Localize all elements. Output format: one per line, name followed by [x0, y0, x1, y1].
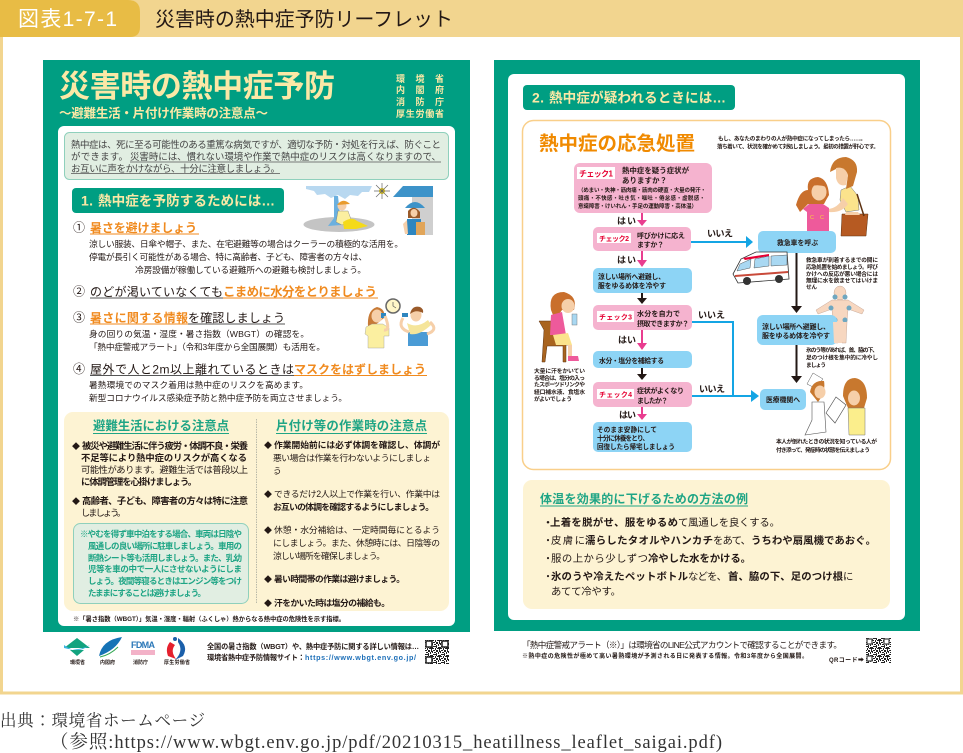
QR code left: [425, 640, 449, 664]
section heading 1: 熱中症を予防するためには…: [98, 192, 275, 208]
note: sweating: がよいでしょう: [534, 395, 572, 403]
advice 1: ①: [73, 220, 85, 234]
note: sweating: 大量に汗をかいてい: [534, 367, 585, 375]
site information: 全国の暑さ指数（WBGT）や、熱中症予防に関する詳しい情報は…: [207, 642, 419, 651]
no label and arrow to ambulance: いいえ: [707, 228, 733, 238]
advice 4: [73, 362, 427, 403]
right column text: にしましょう。また、休憩時には、日陰等の: [273, 537, 440, 548]
step: move to cool place: 涼しい場所へ避難し、: [598, 272, 665, 281]
no label and line from check 3: [692, 310, 733, 396]
no label and arrow to hospital: [692, 384, 759, 402]
source credit: （参照:https://www.wbgt.env.go.jp/pdf/20210315_heatillness_leaflet_saigai.pdf): [50, 732, 722, 753]
source credit: 出典：環境省ホームページ: [0, 711, 205, 730]
check 2: ますか？: [637, 241, 664, 249]
cooling method list: ・: [543, 536, 553, 547]
note: sweating: たスポーツドリンクや: [534, 380, 585, 388]
illustration: mother and girl: [796, 157, 868, 236]
white content area: [58, 126, 455, 626]
intro box: ができます。: [71, 151, 128, 163]
left column text: ◆: [72, 442, 80, 451]
cooling method list: [543, 516, 876, 598]
header band: [0, 0, 963, 37]
site information: 環境省熱中症予防情報サイト：: [207, 653, 305, 662]
car sleeping note: 断熱シート等も活用しましょう。また、乳幼: [88, 553, 242, 563]
step: medical institution: 医療機関へ: [766, 395, 800, 404]
advice 1: [73, 220, 403, 275]
step: call ambulance: [758, 231, 836, 253]
advice 2: のどが渇いていなくても: [90, 284, 223, 299]
QR code right: [866, 638, 891, 663]
figure title: 災害時の熱中症予防リーフレット: [155, 8, 453, 31]
check 1: （めまい・失神・筋肉痛・筋肉の硬直・大量の発汗・: [578, 186, 706, 194]
advice 3: ③: [73, 310, 85, 324]
advice 2: ②: [73, 284, 85, 298]
logo: fire agency: FDMA: [131, 640, 156, 650]
cooling method list: 冷やした水をかける。: [648, 552, 751, 565]
panel: first aid flowchart: [522, 120, 890, 470]
leaflet title: 災害時の熱中症予防: [59, 69, 335, 104]
cooling method list: て風通しを良くする。: [678, 516, 780, 529]
right column text: [264, 439, 440, 608]
advice 4: 新型コロナウイルス感染症予防と熱中症予防を両立させましょう。: [89, 392, 347, 403]
right column text: ◆: [264, 599, 272, 608]
logo: fire agency: 消防庁: [133, 659, 148, 666]
source credit: [0, 711, 722, 753]
advice 3: を確認しましょう: [188, 310, 285, 325]
left column heading: 避難生活における注意点: [93, 418, 229, 433]
cooling method list: ・: [543, 518, 553, 529]
step: rest and go home: 回復したら帰宅しましょう: [597, 442, 675, 451]
right column text: ◆: [264, 526, 272, 535]
check 3: チェック3: [599, 312, 632, 322]
check 2: [593, 227, 691, 251]
site information: [207, 642, 419, 662]
right column text: う。: [273, 466, 283, 476]
left column text: しましょう。: [81, 508, 126, 518]
check 1: 頭痛・不快感・吐き気・嘔吐・倦怠感・虚脱感・: [578, 194, 705, 202]
figure number tab: [0, 0, 140, 37]
cooling method list: などを、: [688, 571, 727, 583]
LINE alert note: [522, 639, 864, 664]
note: ice pack: ましょう: [806, 362, 826, 369]
left column text: 不足等により熱中症のリスクが高くなる: [81, 452, 247, 463]
left column text: 高齢者、子ども、障害者の方々は特に注意: [82, 495, 249, 506]
car sleeping note: たままにすることは避けましょう。: [88, 588, 206, 598]
right column text: お互いの体調を確認するようにしましょう。: [273, 501, 434, 512]
car sleeping note: しょう。夜間等寝るときはエンジン等をつけ: [88, 576, 242, 586]
first aid intro: [717, 134, 879, 150]
check 4: 症状がよくなり: [637, 386, 684, 395]
step: move to cool place: 服をゆるめ体を冷やす: [598, 281, 666, 290]
cooling method list: をあて、: [713, 535, 751, 547]
cooling method list: うちわや扇風機であおぐ。: [751, 534, 876, 547]
logo: environment: 環境省: [70, 659, 85, 666]
no label and arrow to hospital: いいえ: [699, 384, 725, 394]
advice 2: [73, 284, 378, 299]
check 1: ありますか？: [622, 176, 667, 185]
yes label and arrow 2: [617, 251, 647, 267]
check 2: 呼びかけに応え: [637, 231, 685, 240]
arrow to check 4: [637, 368, 647, 380]
advice 1: 涼しい服装、日傘や帽子、また、在宅避難等の場合はクーラーの積極的な活用を。: [89, 238, 403, 249]
car sleeping note: 風通しの良い場所に駐車しましょう。車用の: [88, 541, 242, 551]
check 2: チェック2: [599, 234, 629, 243]
ministries list: 消 防 庁: [396, 96, 444, 107]
note: first aid until arrival: 救急車が到着するまでの間に: [806, 256, 878, 264]
step: cool place right: 服をゆるめ体を冷やす: [762, 331, 830, 340]
note: witness accompanies: 本人が倒れたときの状況を知っている人が: [776, 438, 877, 446]
ministries list: 厚生労働省: [396, 108, 444, 119]
advice 4: ④: [73, 362, 85, 376]
check 1: チェック1: [579, 168, 614, 178]
car sleeping note: [74, 524, 248, 604]
right column text: ◆: [264, 441, 272, 450]
note: sweating: る場合は、塩分の入っ: [534, 374, 585, 382]
right column text: 暑い時間帯の作業は避けましょう。: [274, 573, 405, 584]
section heading 1: 1.: [81, 192, 93, 208]
right column text: ◆: [264, 490, 272, 499]
right column text: 汗をかいた時は塩分の補給も。: [274, 597, 390, 608]
check 4: [593, 382, 692, 407]
step: rehydrate: [593, 351, 692, 368]
check 1: 熱中症を疑う症状が: [622, 166, 690, 175]
intro box: [64, 132, 448, 180]
step: medical institution: [760, 389, 806, 410]
cooling method list: 服の上から少しずつ: [551, 552, 648, 565]
panel: right leaflet page: [494, 60, 920, 631]
cooling method list: 皮膚に: [551, 534, 585, 547]
section heading 2: [523, 85, 735, 110]
illustration: body cooling points: [816, 286, 864, 343]
left column text: 被災や避難生活に伴う疲労・体調不良・栄養: [82, 440, 249, 451]
intro box: お互いに声をかけながら、十分に注意しましょう。: [71, 163, 280, 175]
illustration: people drinking and clock: [365, 299, 434, 348]
left column text: に体調管理を心掛けましょう。: [81, 476, 197, 487]
step: rest and go home: 十分に休養をとり、: [597, 434, 649, 442]
site information: https://www.wbgt.env.go.jp/: [305, 653, 416, 662]
left column text: [72, 440, 249, 518]
right column heading: 片付け等の作業時の注意点: [276, 418, 427, 433]
illustration: mother and girl: CC: [810, 215, 824, 221]
advice 2: こまめに水分をとりましょう: [223, 284, 377, 299]
panel: precautions: [64, 412, 449, 611]
note: first aid until arrival: 応急処置を始めましょう。呼び: [806, 263, 878, 271]
cooling method list: あてて冷やす。: [551, 586, 621, 598]
illustration: girl on chair: [539, 292, 579, 362]
illustration: ambulance: [733, 252, 789, 285]
cooling method list: に: [843, 571, 853, 583]
illustration: nurse and witness: [805, 373, 867, 435]
arrow to check 3: [637, 293, 647, 304]
LINE alert note: ※熱中症の危険性が極めて高い暑熱環境が予測される日に発表する情報。令和3年度から全国展開。: [522, 652, 808, 660]
no label and arrow to ambulance: [691, 228, 753, 248]
yes label and arrow 2: はい: [617, 255, 636, 265]
check 4: ましたか？: [637, 397, 668, 405]
advice 3: 「熱中症警戒アラート」（令和3年度から全国展開）も活用を。: [89, 341, 325, 352]
arrow from ambulance to cool place: [791, 253, 802, 313]
note: first aid until arrival: [806, 256, 878, 291]
advice 3: 身の回りの気温・湿度・暑さ指数（WBGT）の確認を。: [89, 328, 309, 339]
yes label and arrow 4: はい: [619, 410, 636, 420]
note: first aid until arrival: かけへの反応が悪い場合には: [806, 270, 878, 278]
illustration: shade and parasol: [304, 183, 433, 235]
note: witness accompanies: [776, 438, 877, 454]
WBGT footnote: ※「暑さ指数（WBGT）」気温・湿度・輻射（ふくしゃ）熱からなる熱中症の危険性を示す指標。: [73, 614, 345, 623]
section heading 1: [72, 188, 284, 213]
first aid intro: 落ち着いて、状況を確かめて対処しましょう。最初の措置が肝心です。: [717, 142, 879, 150]
check 1: [574, 163, 712, 213]
right column text: 悪い場合は作業を行わないようにしましょ: [273, 452, 431, 463]
cooling method list: ・: [543, 554, 553, 565]
first aid intro: もし、あなたのまわりの人が熱中症になってしまったら……。: [718, 134, 866, 142]
advice 1: 暑さを避けましょう: [90, 220, 197, 235]
step: move to cool place: [593, 268, 692, 293]
panel: ways to lower body temperature: [523, 480, 890, 609]
section heading 2: 2.: [532, 90, 544, 106]
cooling method list: ・: [543, 572, 553, 583]
logo: cabinet office: 内閣府: [100, 659, 115, 666]
check 4: チェック4: [599, 390, 632, 399]
logo: fire agency: [131, 640, 156, 666]
step: cool place right: 涼しい場所へ避難し、: [762, 322, 830, 331]
note: witness accompanies: 付き添って、発症時の状態を伝えましょう: [776, 446, 870, 454]
yes label and arrow 3: はい: [618, 335, 636, 345]
panel: left leaflet page: [43, 60, 470, 632]
note: sweating: [534, 367, 585, 403]
advice 4: 暑熱環境でのマスク着用は熱中症のリスクを高めます。: [89, 379, 308, 390]
note: first aid until arrival: せん: [806, 284, 817, 291]
left column text: 可能性があります。避難生活では普段以上: [81, 464, 248, 475]
cooling heading: 体温を効果的に下げるための方法の例: [540, 491, 748, 506]
yes label and arrow 3: [618, 330, 647, 350]
car sleeping note: ※やむを得ず車中泊をする場合、車両は日陰や: [80, 529, 242, 539]
cooling method list: 氷のうや冷えたペットボトル: [551, 570, 689, 583]
leaflet subtitle: ～避難生活・片付け作業時の注意点～: [59, 106, 268, 120]
check 1: 意識障害・けいれん・手足の運動障害・高体温）: [578, 202, 697, 210]
first aid heading: 熱中症の応急処置: [539, 132, 695, 155]
advice 4: マスクをはずしましょう: [294, 362, 426, 376]
right column text: ◆: [264, 575, 272, 584]
note: ice pack: 氷のう等があれば、首、脇の下、: [806, 346, 878, 354]
yes label and arrow 4: [619, 407, 647, 420]
ministries list: [396, 73, 444, 119]
note: ice pack: 足のつけ根を集中的に冷やし: [806, 354, 878, 362]
step: rehydrate: 水分・塩分を補給する: [599, 356, 664, 365]
white content area: [508, 74, 905, 620]
LINE alert note: QRコード➡: [829, 657, 864, 664]
ministry logos: [64, 637, 190, 666]
cooling method list: 濡らしたタオルやハンカチ: [585, 535, 713, 547]
ministries list: 環 境 省: [396, 73, 444, 84]
step: cool place right: [757, 315, 846, 345]
check 3: 水分を自力で: [637, 309, 680, 318]
advice 1: 冷房設備が稼働している避難所への避難も検討しましょう。: [135, 264, 366, 275]
note: ice pack: [806, 346, 878, 369]
figure number tab: 図表1-7-1: [18, 8, 117, 31]
step: rest and go home: [593, 422, 692, 452]
LINE alert note: 「熱中症警戒アラート（※）」は環境省のLINE公式アカウントで確認することができます。: [522, 639, 842, 650]
yes label and arrow 1: はい: [617, 216, 636, 226]
advice 4: 屋外で人と2m以上離れているときは: [90, 362, 294, 376]
cooling method list: 上着を脱がせ、服をゆるめ: [550, 516, 678, 529]
logo: MHLW: 厚生労働省: [164, 659, 190, 666]
cooling method list: 首、脇の下、足のつけ根: [728, 570, 844, 583]
right column text: 涼しい場所を確保しましょう。: [273, 550, 385, 561]
right column text: 作業開始前には必ず体調を確認し、体調が: [274, 439, 440, 450]
check 3: 摂取できますか？: [637, 319, 689, 328]
intro box: 熱中症は、死に至る可能性のある重篤な病気ですが、適切な予防・対処を行えば、防ぐこと: [71, 139, 441, 151]
arrow to medical institution: [791, 345, 802, 383]
advice 3: 暑さに関する情報: [90, 310, 188, 325]
right column text: 休憩・水分補給は、一定時間毎にとるよう: [274, 524, 440, 535]
note: sweating: 経口補水液、食塩水: [534, 388, 585, 396]
step: call ambulance: 救急車を呼ぶ: [777, 238, 818, 247]
car sleeping note: 児等を車の中で一人にさせないようにしま: [88, 564, 242, 574]
right column text: できるだけ2人以上で作業を行い、作業中は: [274, 488, 440, 499]
step: rest and go home: そのまま安静にして: [597, 425, 657, 434]
check 3: [593, 305, 692, 330]
advice 3: [73, 310, 325, 352]
ministries list: 内 閣 府: [396, 84, 444, 95]
left column text: ◆: [72, 497, 80, 506]
yes label and arrow 1: [617, 213, 647, 226]
note: first aid until arrival: 無理に水を飲ませてはいけま: [806, 276, 878, 284]
intro box: 災害時には、慣れない環境や作業で熱中症のリスクは高くなりますので、: [130, 151, 441, 163]
advice 1: 停電が長引く可能性がある場合、特に高齢者、子ども、障害者の方々は、: [89, 251, 367, 262]
no label and line from check 3: いいえ: [698, 310, 725, 320]
section heading 2: 熱中症が疑われるときには…: [549, 90, 726, 106]
